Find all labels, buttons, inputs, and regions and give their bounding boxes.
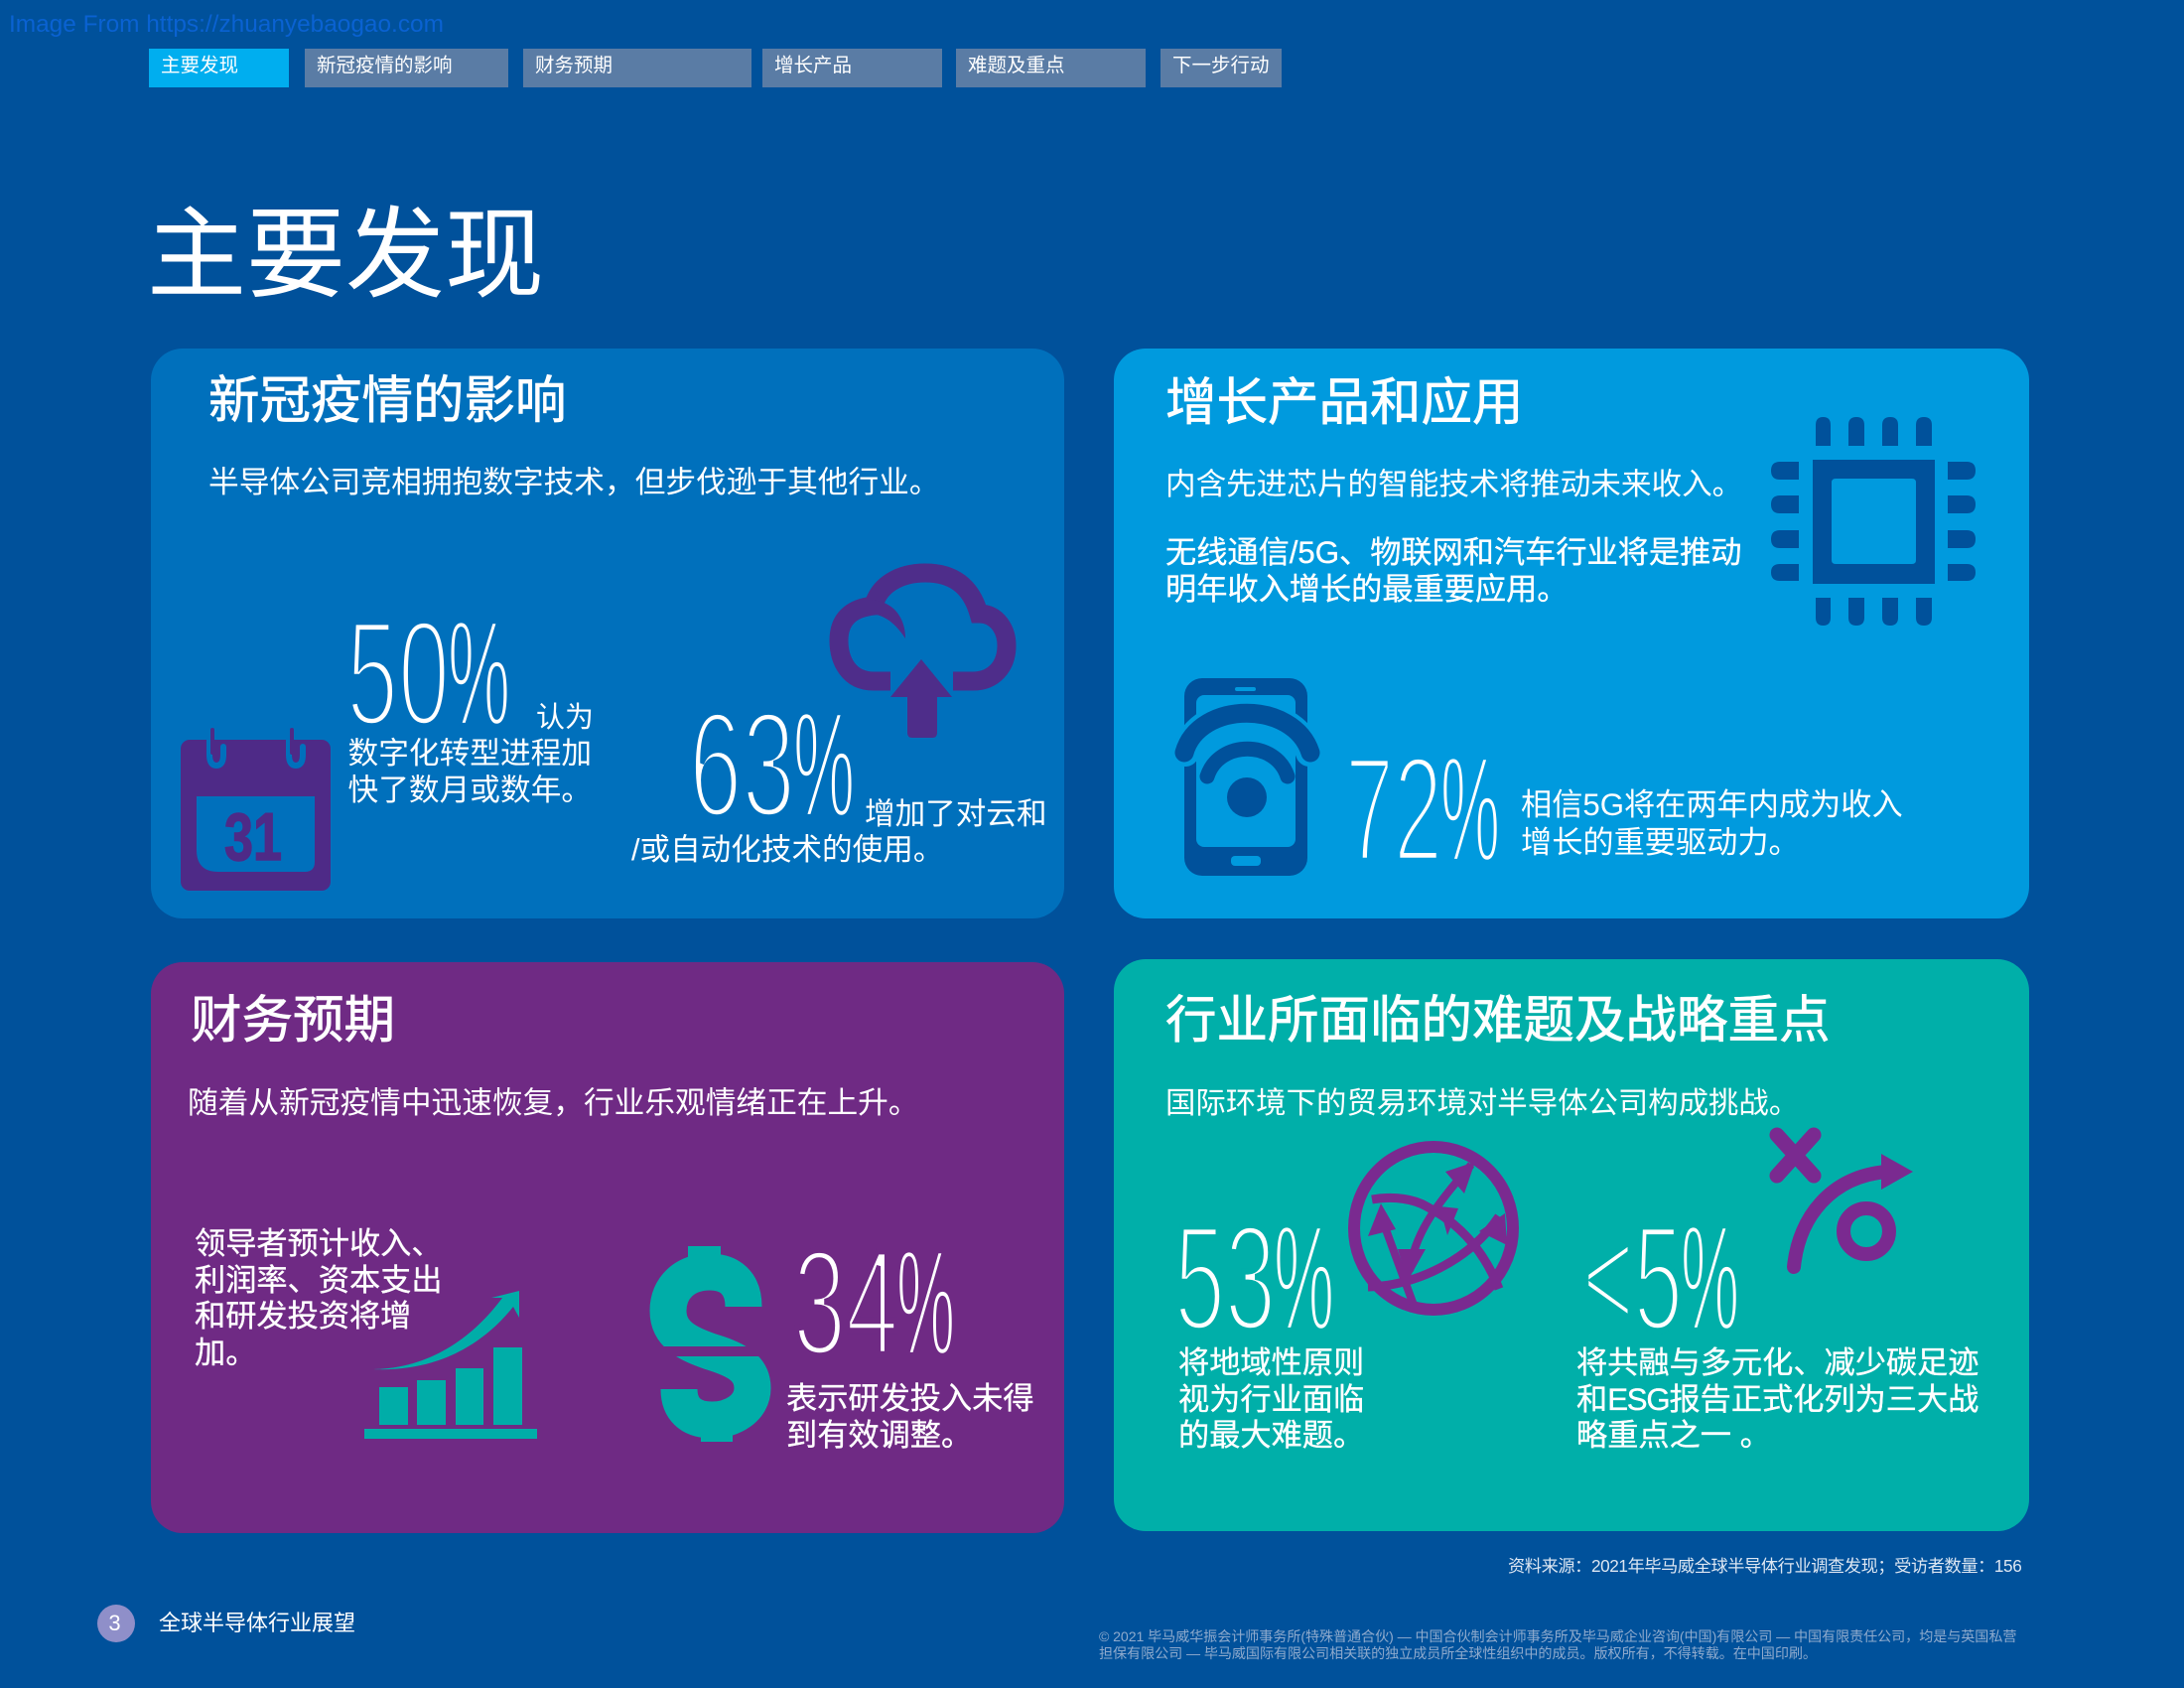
text: <5% description: 将共融与多元化、减少碳足迹 [1576, 1345, 1979, 1380]
intro text: 国际环境下的贸易环境对半导体公司构成挑战。 [1165, 1086, 1799, 1120]
footer title: 全球半导体行业展望 [159, 1611, 355, 1635]
icon: rising bar chart [364, 1291, 537, 1439]
stat: 53%: 53 [1174, 1194, 1276, 1361]
icon: cloud upload [839, 573, 1007, 738]
text: 63% description line one: 增加了对云和 [865, 797, 1047, 831]
text: leaders expectation: 利润率、资本支出 [195, 1263, 443, 1298]
tab: 新冠疫情的影响: 新冠疫情的影响 [317, 55, 453, 76]
text: 50% description: 快了数月或数年。 [347, 773, 592, 807]
panel: 新冠疫情的影响 [151, 349, 1064, 918]
icons and stats [1174, 1128, 1913, 1361]
text: leaders expectation: 领导者预计收入、 [195, 1226, 443, 1261]
title: 主要发现 [147, 200, 544, 311]
text: 53% description: 的最大难题。 [1178, 1418, 1364, 1453]
panel: 增长产品和应用 [1114, 349, 2029, 918]
tab: 财务预期 [523, 49, 751, 87]
icons and stat: % [1440, 725, 1500, 893]
tab: 财务预期: 财务预期 [535, 55, 613, 76]
legal text: © 2021 毕马威华振会计师事务所(特殊普通合伙) — 中国合伙制会计师事务所及毕马威企业咨询(中国)有限公司 — 中国有限责任公司，均是与英国私营 [1099, 1628, 2016, 1644]
text: 50% description [347, 736, 592, 807]
text: 53% description: 将地域性原则 [1178, 1345, 1364, 1380]
heading: 增长产品和应用 [1165, 373, 1524, 431]
stat: 50%: 50 [346, 589, 450, 757]
icons and stats: % [1681, 1194, 1739, 1361]
text: 72% description [1521, 787, 1903, 860]
tab: 主要发现: 主要发现 [161, 55, 238, 76]
icons and stat: % [896, 1218, 955, 1386]
stat: 72%: 72 [1345, 725, 1442, 893]
page number badge [97, 1605, 135, 1642]
text: 53% description: 视为行业面临 [1178, 1382, 1364, 1417]
heading: 行业所面临的难题及战略重点 [1165, 991, 1831, 1049]
panel: 财务预期 [151, 962, 1064, 1533]
intro text: 随着从新冠疫情中迅速恢复，行业乐观情绪正在上升。 [188, 1085, 919, 1120]
tab: 新冠疫情的影响 [305, 49, 508, 87]
text: <5% description: 和ESG报告正式化列为三大战 [1576, 1382, 1979, 1417]
text: 34% description [786, 1381, 1034, 1453]
intro text: 内含先进芯片的智能技术将推动未来收入。 [1165, 467, 1742, 500]
tab: 主要发现 [149, 49, 289, 87]
icons and stat [364, 1218, 955, 1442]
text: 53% description [1178, 1345, 1364, 1453]
source note: 资料来源：2021年毕马威全球半导体行业调查发现；受访者数量：156 [1508, 1556, 2021, 1576]
text: <5% description [1576, 1345, 1979, 1453]
text: 72% description: 相信5G将在两年内成为收入 [1521, 787, 1903, 822]
tab: 下一步行动 [1160, 49, 1282, 87]
heading: 新冠疫情的影响 [208, 371, 567, 429]
icon: chip [1771, 417, 1976, 626]
text: key applications [1165, 535, 1741, 606]
tab: 增长产品: 增长产品 [774, 55, 852, 76]
icon: dollar sign [645, 1246, 774, 1442]
tab: 难题及重点 [956, 49, 1146, 87]
icons and stats: % [793, 680, 855, 848]
text: leaders expectation: 和研发投资将增 [195, 1299, 411, 1334]
stat: <5%: <5 [1582, 1194, 1683, 1361]
text: 34% description: 表示研发投入未得 [786, 1381, 1034, 1416]
icons and stats: % [1274, 1194, 1334, 1361]
heading: 财务预期 [191, 991, 395, 1049]
text: key applications: 明年收入增长的最重要应用。 [1165, 572, 1568, 606]
label: 认为: 认为 [536, 701, 594, 733]
icon: strategy play [1777, 1135, 1913, 1267]
icon: globe with arrows [1354, 1147, 1513, 1310]
icon: calendar [181, 730, 331, 891]
tab: 下一步行动: 下一步行动 [1172, 55, 1270, 76]
text: leaders expectation: 加。 [195, 1336, 256, 1370]
text: 50% description: 数字化转型进程加 [347, 736, 592, 771]
text: 63% description line two: /或自动化技术的使用。 [631, 833, 943, 867]
text: <5% description: 略重点之一 。 [1576, 1418, 1771, 1453]
watermark: Image From https://zhuanyebaogao.com [9, 11, 444, 38]
icon: phone with signal [1184, 678, 1310, 876]
stat: 34%: 34 [793, 1218, 898, 1386]
intro text: 半导体公司竞相拥抱数字技术，但步伐逊于其他行业。 [208, 465, 940, 499]
legal text [1099, 1628, 2016, 1661]
icon: calendar: 31 [224, 799, 282, 875]
tab: 难题及重点: 难题及重点 [968, 55, 1065, 76]
icons and stats [181, 564, 1017, 891]
navigation tabs [149, 49, 1282, 87]
tab: 增长产品 [762, 49, 942, 87]
icons and stat [1175, 417, 1976, 893]
text: 34% description: 到有效调整。 [786, 1418, 972, 1453]
text: leaders expectation [195, 1226, 443, 1370]
page number badge: 3 [108, 1611, 121, 1635]
text: 72% description: 增长的重要驱动力。 [1521, 825, 1800, 860]
legal text: 担保有限公司 — 毕马威国际有限公司相关联的独立成员所全球性组织中的成员。版权所有，不得转载。在中国印刷。 [1099, 1645, 1817, 1661]
text: key applications: 无线通信/5G、物联网和汽车行业将是推动 [1165, 535, 1741, 570]
stat: 63%: 63 [689, 680, 795, 848]
panel: 行业所面临的难题及战略重点 [1114, 959, 2029, 1531]
icons and stats: % [448, 589, 510, 757]
